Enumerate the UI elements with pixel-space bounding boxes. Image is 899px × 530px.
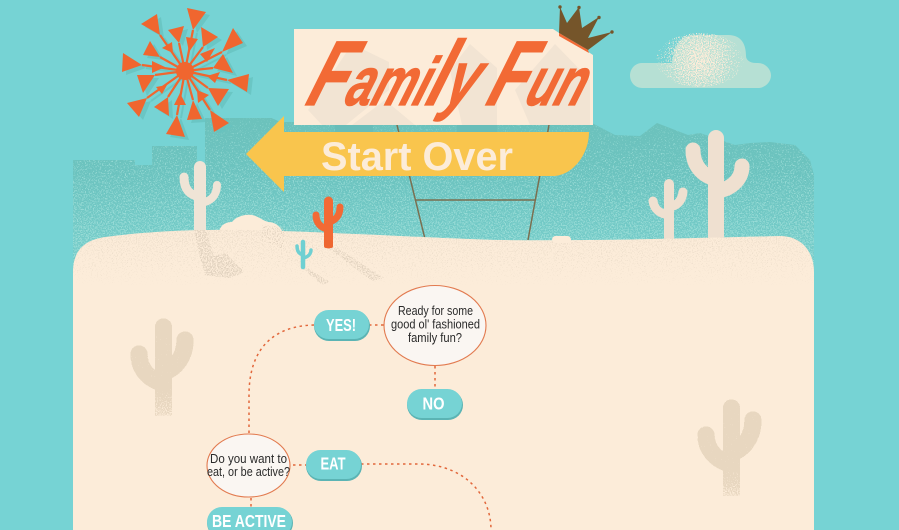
title sign <box>294 29 593 125</box>
button: yes: YES! <box>326 315 356 335</box>
button: yes <box>314 310 370 341</box>
title text: Family Fun <box>297 22 610 125</box>
arrow label: Start Over <box>321 135 513 179</box>
ground rock <box>552 236 571 243</box>
button: eat: EAT <box>320 454 346 474</box>
question: ready for fun <box>384 286 486 366</box>
button: be active <box>207 507 293 530</box>
question: ready for fun: family fun? <box>408 330 462 345</box>
back sign shadow blocks <box>335 125 497 132</box>
sign legs <box>397 125 549 240</box>
bush <box>219 215 284 240</box>
cactus: small teal <box>297 242 311 267</box>
question: eat or active <box>207 434 290 497</box>
windmill shadow <box>126 11 253 140</box>
ground <box>73 230 814 530</box>
question: eat or active: Do you want to <box>210 451 287 466</box>
cactus: left cream <box>184 167 217 236</box>
title letter shadows <box>308 44 590 125</box>
windmill blades <box>122 8 249 137</box>
cloud <box>630 33 771 88</box>
windmill <box>122 8 253 140</box>
cactus: orange <box>316 201 340 248</box>
question: ready for fun: Ready for some <box>398 303 473 318</box>
crown <box>558 5 614 53</box>
cactus: faded lower left <box>139 318 185 416</box>
question: eat or active: eat, or be active? <box>207 464 290 479</box>
button: no: NO <box>422 394 444 414</box>
cactus shadows on ground <box>194 224 384 285</box>
distant skyline and mountains <box>73 118 814 270</box>
cactus: faded lower right <box>706 400 753 496</box>
cactus: small right cream <box>653 184 683 244</box>
cactus: large right cream <box>693 138 742 244</box>
flow connectors <box>249 325 491 530</box>
button: no <box>407 389 463 420</box>
start over arrow <box>246 116 589 192</box>
question: ready for fun: good ol' fashioned <box>391 316 480 332</box>
button: eat <box>306 450 362 481</box>
